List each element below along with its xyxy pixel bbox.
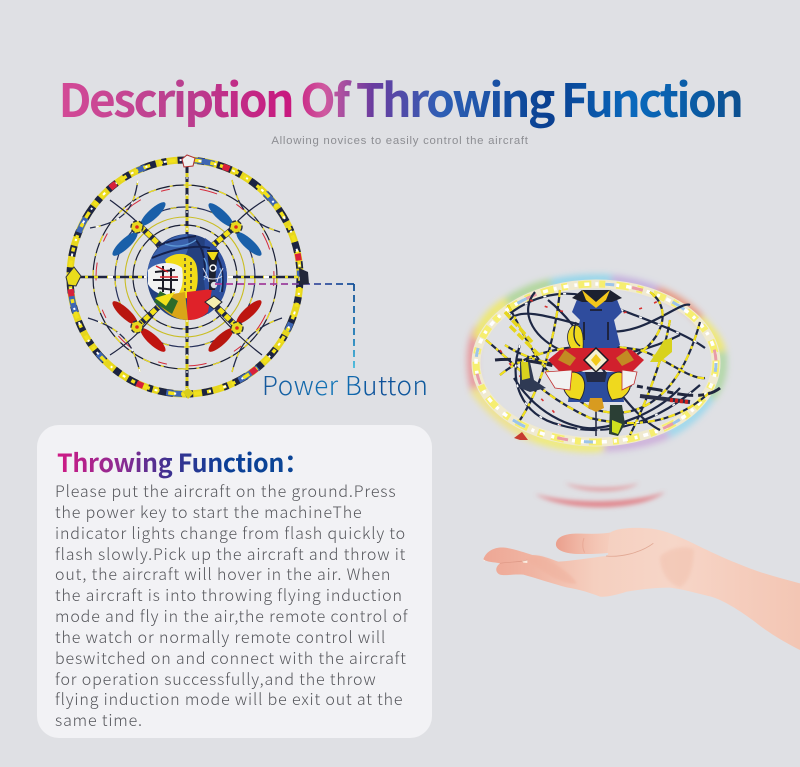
subtitle: Allowing novices to easily control the aircraft (271, 135, 529, 147)
panel text: the power key to start the machineThe (55, 499, 362, 523)
title: Description Of Throwing Function (59, 65, 741, 131)
outer ring (476, 284, 716, 442)
panel text (55, 478, 408, 731)
wire cage (486, 290, 720, 436)
panel text: indicator lights change from flash quickly to (55, 520, 406, 544)
central body (147, 234, 227, 320)
panel text: the aircraft is into throwing flying induction (55, 582, 403, 606)
central body (545, 290, 644, 436)
battery tab (299, 268, 309, 285)
arms and side details (514, 338, 690, 440)
panel text: flying induction mode will be exit out at the (55, 686, 403, 710)
panel text: same time. (55, 707, 143, 731)
panel text: mode and fly in the air,the remote control of (55, 603, 408, 627)
panel text: for operation successfully,and the throw (55, 666, 377, 690)
panel text: Please put the aircraft on the ground.Press (55, 478, 396, 502)
finger shade (527, 556, 577, 584)
shading (660, 547, 694, 587)
panel text: the watch or normally remote control will (55, 624, 386, 648)
coloured glow (472, 279, 722, 447)
panel text: out, the aircraft will hover in the air. When (55, 561, 391, 585)
motion arcs (535, 483, 665, 507)
propellers (110, 199, 264, 355)
thumb tint (556, 533, 610, 554)
panel text: beswitched on and connect with the aircraft (55, 645, 407, 669)
panel text: flash slowly.Pick up the aircraft and throw it (55, 541, 406, 565)
panel: throwing function (37, 425, 432, 738)
outer graffiti ring (70, 160, 300, 394)
spokes (72, 160, 298, 396)
concentric inner rings (93, 185, 277, 369)
hand and arm (483, 528, 800, 650)
panel heading: Throwing Function： (57, 444, 309, 480)
label: power button: Power Button (262, 366, 428, 403)
power button pointer (215, 284, 354, 372)
